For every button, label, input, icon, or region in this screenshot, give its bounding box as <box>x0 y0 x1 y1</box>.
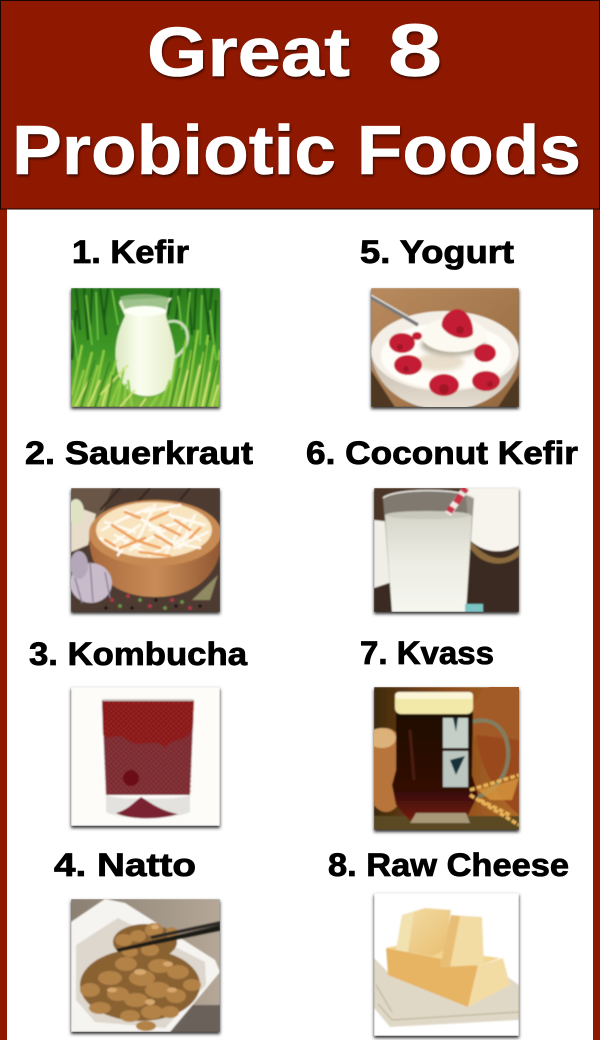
beans <box>80 923 201 1031</box>
panel: 3 Kombucha <box>29 636 247 828</box>
label: 3. Kombucha: 3. Kombucha <box>29 636 247 672</box>
photo: raw cheese on cloth <box>374 893 519 1038</box>
shredded cabbage <box>100 505 208 555</box>
label: 1. Kefir: 1. Kefir <box>72 234 189 270</box>
label: 5. Yogurt: 5. Yogurt <box>360 234 514 270</box>
label: 8. Raw Cheese: 8. Raw Cheese <box>328 847 569 883</box>
panel: 6 Coconut Kefir <box>306 435 578 614</box>
upper left block <box>396 908 451 956</box>
photo: milk jug in grass <box>71 288 222 409</box>
title: numeral 8: 8 <box>388 9 442 92</box>
panel: 5 Yogurt <box>360 234 519 410</box>
cloth <box>374 958 519 1027</box>
title banner <box>0 0 600 209</box>
title: Great: Great <box>147 13 350 91</box>
window glints <box>443 718 468 748</box>
bowl outside <box>371 356 519 407</box>
photo: mug of kvass with bread and wheat <box>371 686 522 835</box>
garlic <box>70 563 112 603</box>
label: 2. Sauerkraut: 2. Sauerkraut <box>25 435 253 471</box>
glass base <box>106 795 190 818</box>
bread <box>374 726 398 813</box>
panel: 8 Raw Cheese <box>328 847 569 1038</box>
title: Probiotic Foods: Probiotic Foods <box>12 111 581 189</box>
straw <box>448 488 466 514</box>
photo: natto in white tray with chopsticks <box>71 899 220 1034</box>
spoon <box>371 297 418 325</box>
panel: 1 Kefir <box>71 234 222 409</box>
label: 6. Coconut Kefir: 6. Coconut Kefir <box>306 435 578 471</box>
glass <box>382 490 475 593</box>
panel: 2 Sauerkraut <box>25 435 253 614</box>
bean mass <box>80 949 200 1021</box>
bottom block <box>386 945 500 966</box>
bowl <box>89 535 222 597</box>
mug <box>392 712 478 823</box>
front blades <box>72 330 222 407</box>
label: 4. Natto: 4. Natto <box>54 847 196 883</box>
label: 7. Kvass: 7. Kvass <box>360 635 494 671</box>
chopsticks <box>116 925 220 952</box>
wheat <box>478 778 519 800</box>
handle <box>472 720 508 798</box>
raspberries <box>389 309 500 396</box>
panel: 4 Natto <box>54 847 220 1034</box>
photo: glass of kombucha <box>71 687 220 828</box>
photo: glass of coconut kefir <box>374 488 519 614</box>
photo: sauerkraut in wooden bowl <box>68 488 222 614</box>
coconut <box>465 488 519 551</box>
jug body <box>115 298 175 396</box>
bay leaf <box>192 575 218 600</box>
photo: yogurt bowl with raspberries <box>371 288 519 410</box>
peppercorns <box>110 594 192 610</box>
tray <box>71 899 220 1032</box>
upper right block <box>440 915 484 967</box>
handle <box>168 321 188 360</box>
panel: 7 Kvass <box>361 641 522 835</box>
